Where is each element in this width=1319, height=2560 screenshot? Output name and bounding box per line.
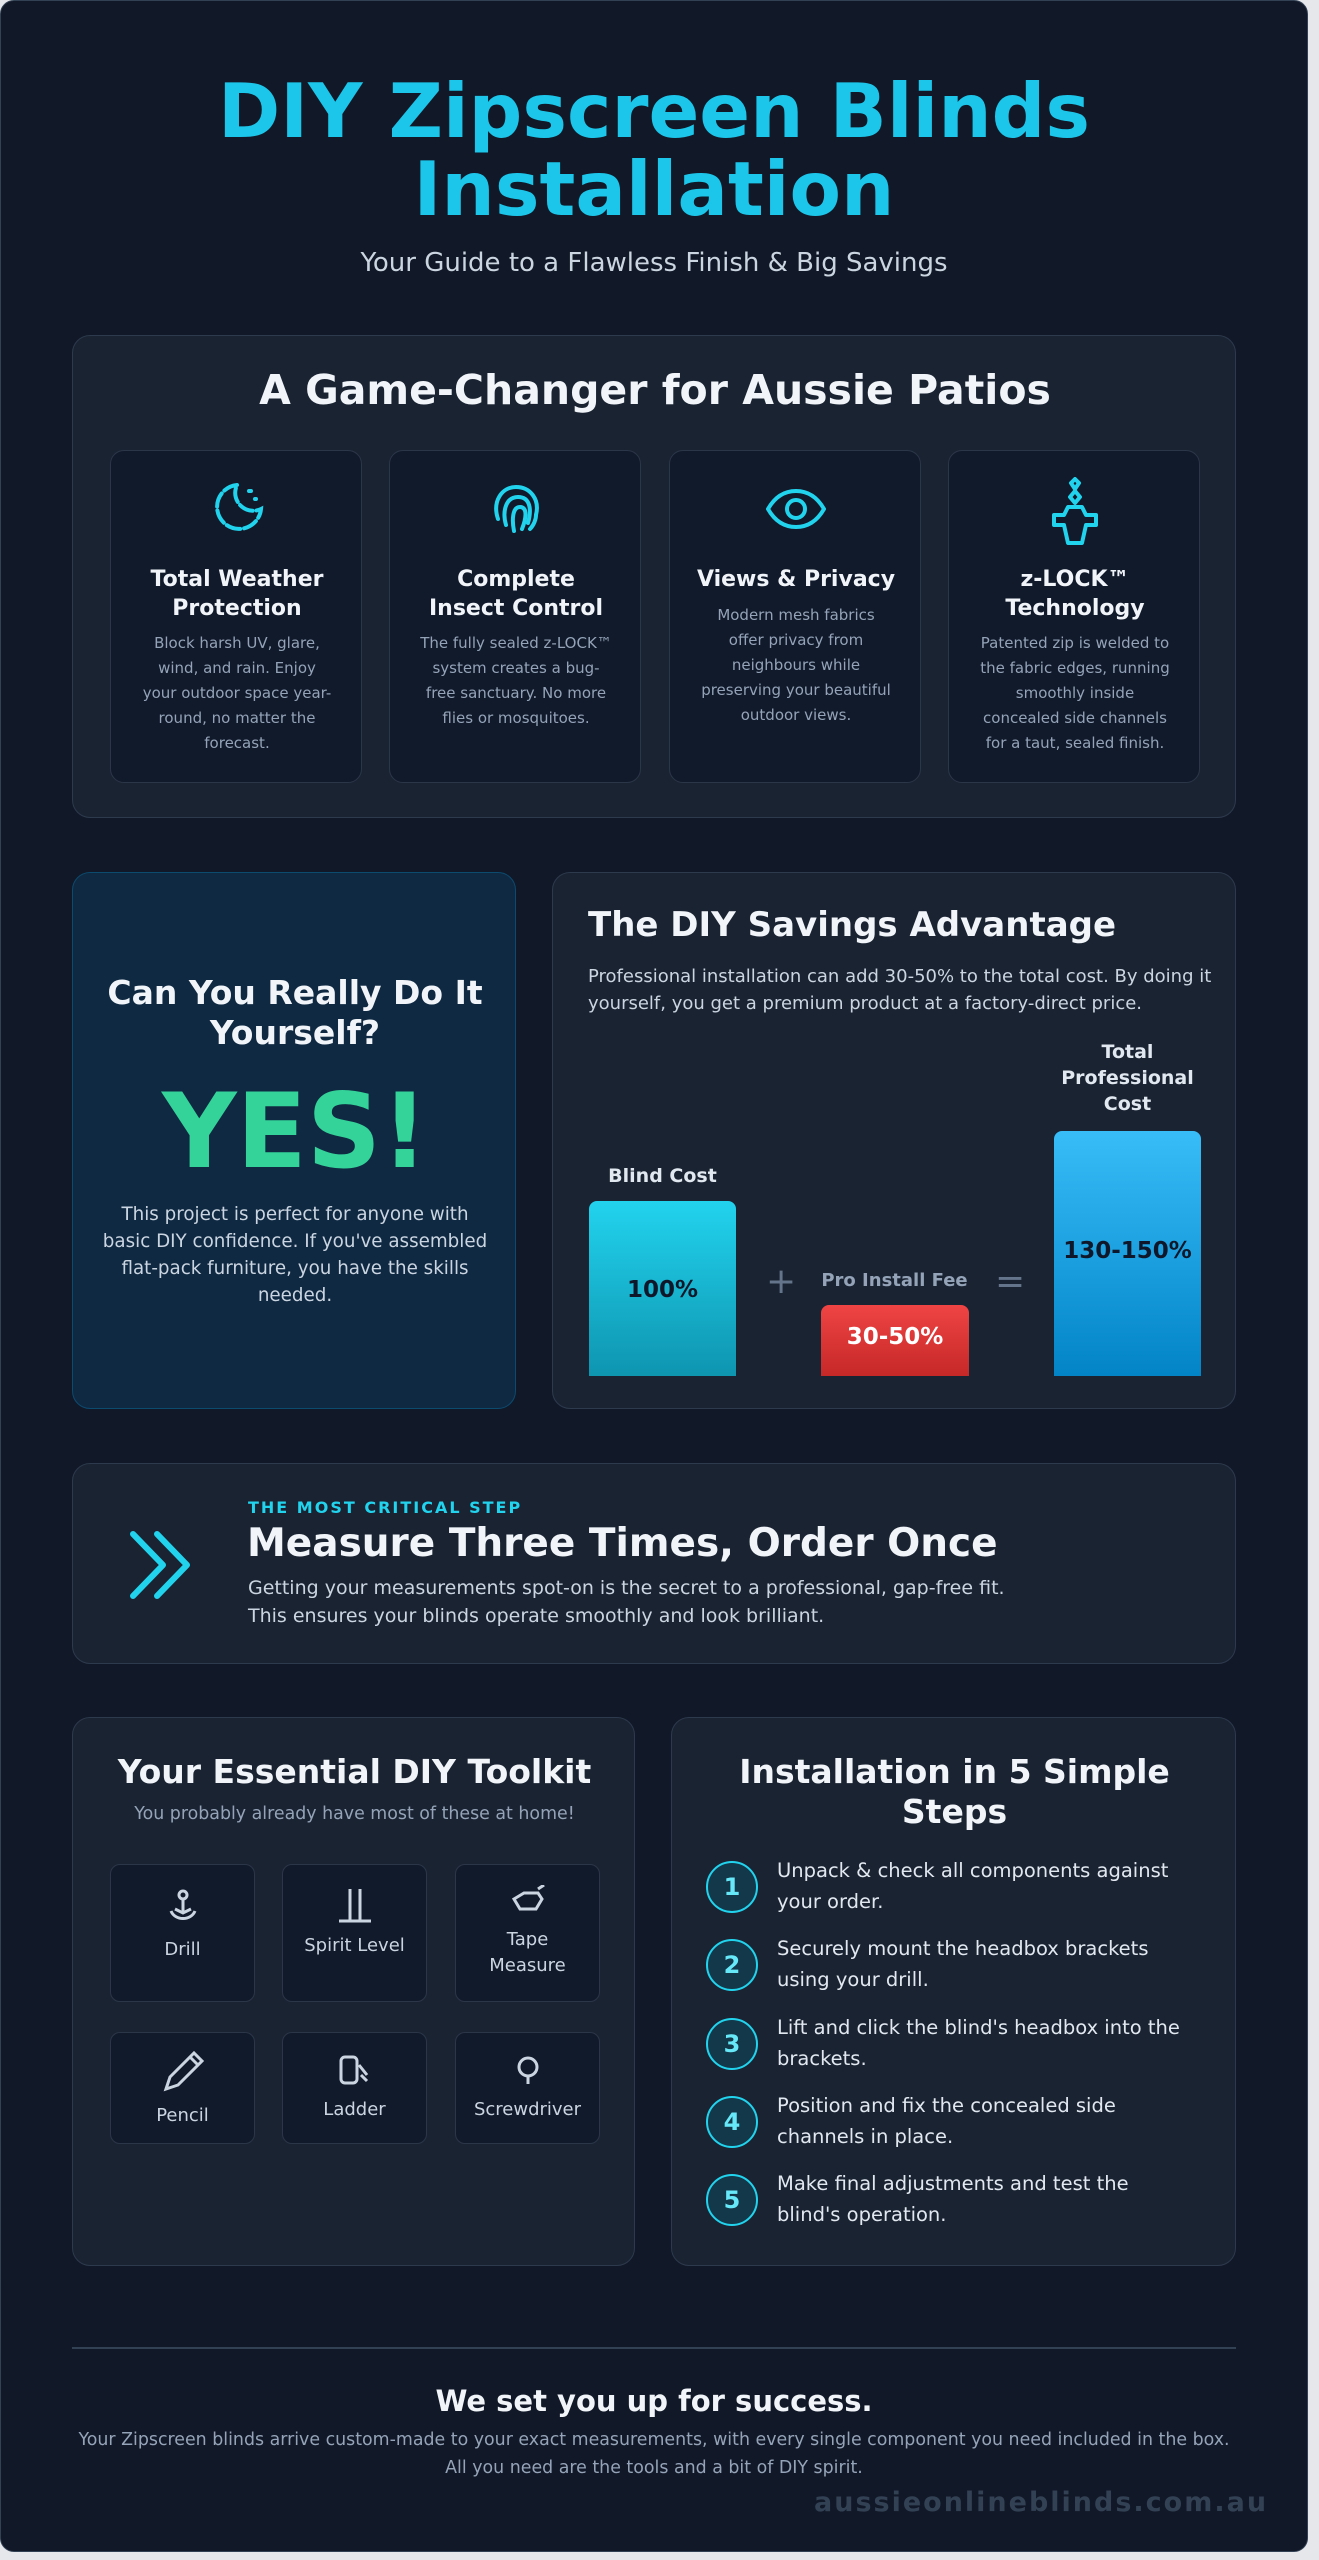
text: This project is perfect for anyone with basic DIY confidence. If you've assembled flat-pack furniture, you have the skills needed. <box>103 1204 487 1306</box>
card: zlock: Patented zip is welded to the fabric edges, running smoothly inside concealed side channels for a taut, sealed finish. <box>980 634 1170 752</box>
tool: level <box>282 1864 427 2002</box>
icon: moon <box>215 483 264 531</box>
heading: game changer: A Game-Changer for Aussie Patios <box>259 366 1051 414</box>
heading: Can You Really Do It <box>107 973 483 1012</box>
tool: pencil: Pencil <box>156 2105 209 2126</box>
tool: screwdriver <box>455 2032 600 2144</box>
card: weather: Block harsh UV, glare, wind, and rain. Enjoy your outdoor space year-round, no matter the forecast. <box>143 634 331 752</box>
tool: drill: Drill <box>164 1939 201 1960</box>
step 2: Securely mount the headbox brackets using your drill. <box>777 1937 1148 1991</box>
step 4: Position and fix the concealed side channels in place. <box>777 2094 1116 2148</box>
bar chart: Total <box>1102 1041 1153 1063</box>
text: Getting your measurements spot-on is the secret to a professional, gap-free fit. <box>248 1577 1005 1599</box>
tool: tape: Tape <box>507 1929 548 1950</box>
card: insect: The fully sealed z-LOCK™ system creates a bug-free sanctuary. No more flies or mosquitoes. <box>420 634 612 727</box>
bar chart: 100% <box>627 1277 698 1303</box>
bar chart: 130-150% <box>1063 1238 1192 1264</box>
sub: You probably already have most of these at home! <box>134 1804 575 1824</box>
panel: can you diy <box>72 872 516 1409</box>
bar chart: Blind Cost <box>608 1165 717 1187</box>
bar chart <box>589 1041 1201 1376</box>
panel: savings <box>552 872 1236 1409</box>
card: weather: Total Weather <box>151 567 323 592</box>
panel: toolkit <box>72 1717 635 2266</box>
tool: ladder: Ladder <box>323 2099 386 2120</box>
card: weather <box>110 450 362 783</box>
panel: measure <box>72 1463 1236 1664</box>
panel: features <box>72 335 1236 818</box>
card: weather: Protection <box>172 596 302 621</box>
step 4: 4 <box>724 2108 740 2136</box>
bar chart: + <box>766 1261 796 1302</box>
heading: The DIY Savings Advantage <box>588 905 1116 945</box>
icon: chevrons <box>130 1531 190 1599</box>
step 3: 3 <box>724 2030 740 2058</box>
text: This ensures your blinds operate smoothly and look brilliant. <box>248 1605 824 1627</box>
card: views: Modern mesh fabrics offer privacy from neighbours while preserving your beautiful outdoor views. <box>701 606 891 724</box>
tool: level: Spirit Level <box>304 1935 405 1956</box>
big yes: YES! <box>162 1072 428 1192</box>
card: zlock <box>948 450 1200 783</box>
card: zlock: Technology <box>1005 596 1145 621</box>
footer text: Your Zipscreen blinds arrive custom-made to your exact measurements, with every single component you need included in the box. <box>78 2430 1230 2450</box>
tool: tape <box>455 1864 600 2002</box>
heading <box>739 1752 1170 1831</box>
heading: Measure Three Times, Order Once <box>247 1521 998 1566</box>
tool: screwdriver: Screwdriver <box>474 2099 581 2120</box>
icon: zip <box>1052 477 1098 545</box>
bar chart: Professional <box>1061 1067 1194 1089</box>
card: insect <box>389 450 641 783</box>
bar chart: Pro Install Fee <box>821 1270 968 1291</box>
card: insect: Complete <box>457 567 575 592</box>
heading: Yourself? <box>210 1013 380 1052</box>
icon: fingerprint <box>494 485 539 533</box>
title: Installation <box>414 145 894 233</box>
step 5: Make final adjustments and test the blind's operation. <box>777 2172 1129 2226</box>
step 2: 2 <box>724 1951 740 1979</box>
card: views <box>669 450 921 783</box>
card: insect: Insect Control <box>429 596 603 621</box>
card: zlock: z-LOCK™ <box>1020 567 1130 592</box>
text: Professional installation can add 30-50% to the total cost. By doing it yourself, you get a premium product at a factory-direct price. <box>588 966 1211 1014</box>
title: DIY Zipscreen Blinds <box>218 67 1090 155</box>
icon: eye <box>766 489 826 529</box>
text <box>248 1577 1005 1627</box>
tool: tape: Measure <box>489 1955 566 1976</box>
subtitle: Your Guide to a Flawless Finish & Big Savings <box>360 248 948 278</box>
heading: Your Essential DIY Toolkit <box>118 1752 591 1791</box>
step 3: Lift and click the blind's headbox into the brackets. <box>777 2016 1180 2070</box>
tool: ladder <box>282 2032 427 2144</box>
footer text: All you need are the tools and a bit of DIY spirit. <box>445 2458 863 2478</box>
tool: drill <box>110 1864 255 2002</box>
watermark: aussieonlineblinds.com.au <box>814 2487 1268 2518</box>
bar chart: Cost <box>1104 1093 1151 1115</box>
heading: Steps <box>902 1792 1007 1831</box>
panel: steps <box>671 1717 1236 2266</box>
label: THE MOST CRITICAL STEP <box>248 1498 522 1517</box>
step 1: 1 <box>724 1873 740 1901</box>
footer text <box>78 2430 1230 2478</box>
tool: pencil <box>110 2032 255 2144</box>
step 1: Unpack & check all components against your order. <box>777 1859 1168 1913</box>
footer heading: We set you up for success. <box>435 2384 873 2418</box>
step 5: 5 <box>724 2186 740 2214</box>
card: views: Views & Privacy <box>697 567 895 592</box>
heading <box>107 973 483 1052</box>
bar chart: = <box>995 1261 1025 1302</box>
heading: Installation in 5 Simple <box>739 1752 1170 1791</box>
bar chart: 30-50% <box>847 1324 943 1350</box>
title <box>218 67 1090 233</box>
